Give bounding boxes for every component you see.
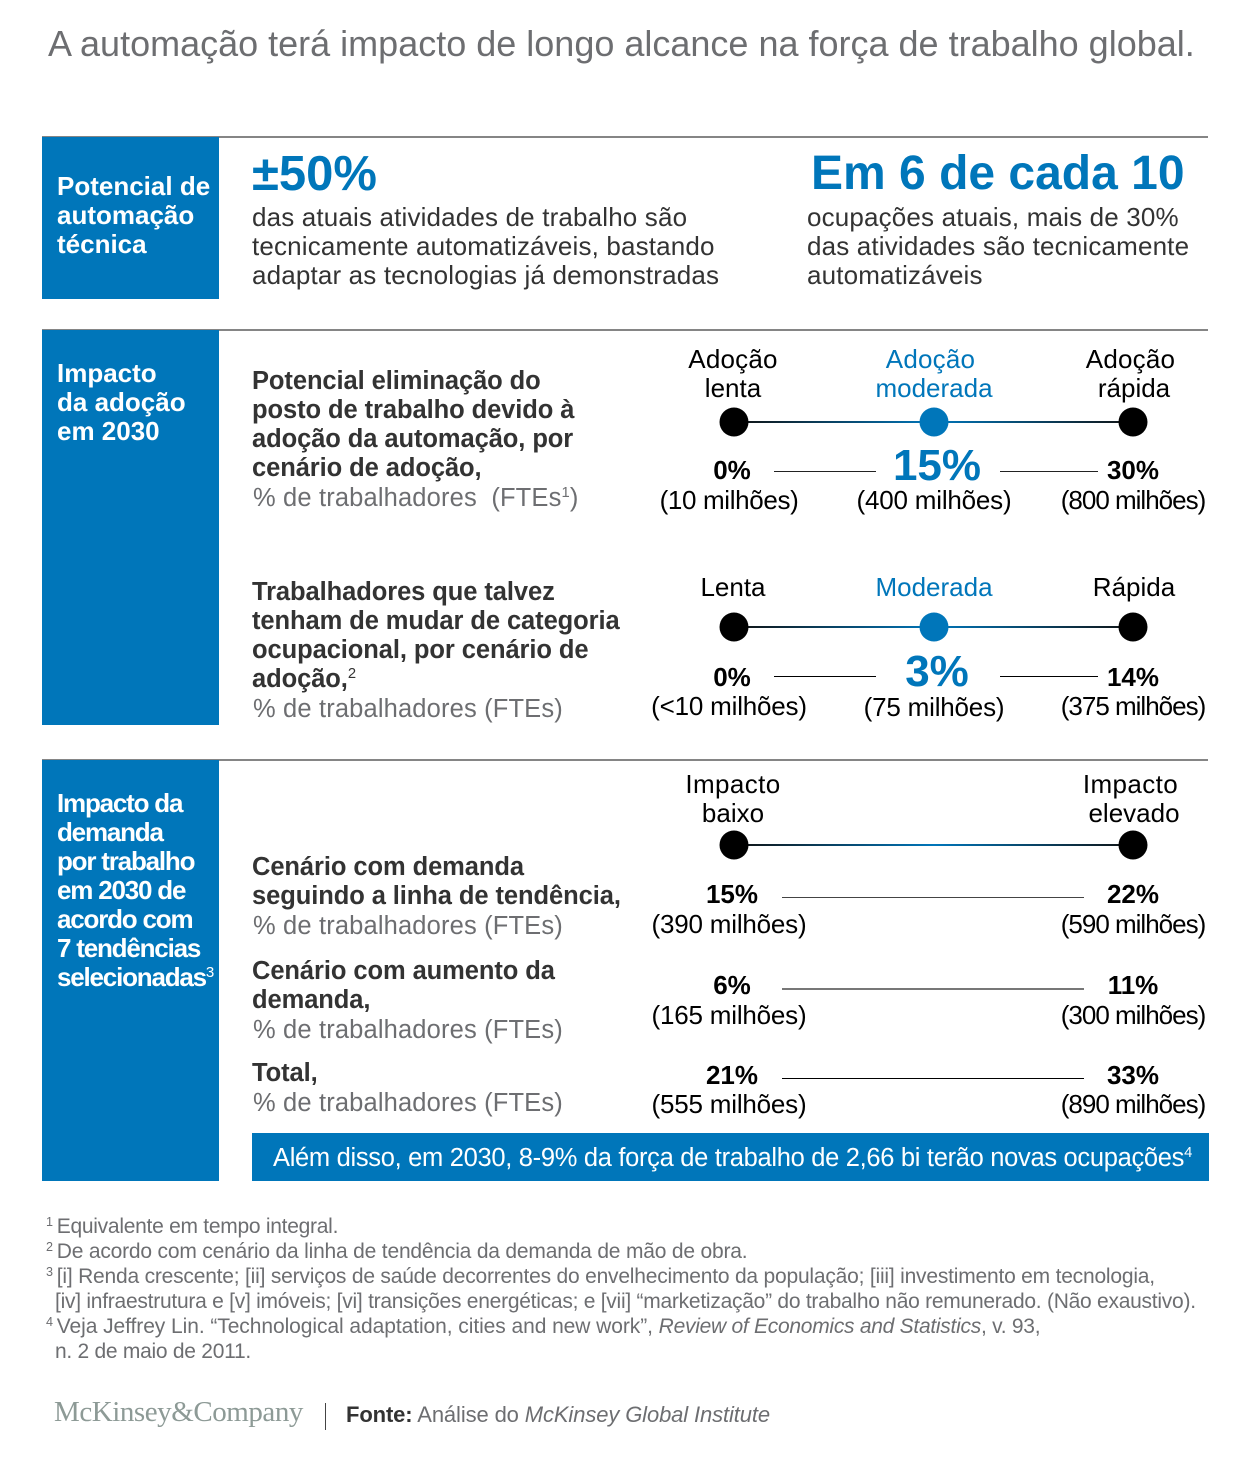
scale: impacto xyxy=(720,830,1148,860)
row label: total: Total, xyxy=(252,1058,318,1086)
label: impacto elevado: Impacto xyxy=(1083,769,1178,799)
row label: mudança de categoria: ocupacional, por cenário de xyxy=(252,636,588,664)
sidebar heading: demanda: demanda xyxy=(57,817,163,847)
value: 3%: 3% xyxy=(905,647,969,696)
row label: eliminação xyxy=(252,366,578,512)
scenario labels: eliminação xyxy=(688,344,1175,402)
value: 21%: 21% xyxy=(706,1060,758,1090)
scale: eliminação xyxy=(720,408,1148,642)
text: ocupações atuais xyxy=(807,202,1189,290)
label: adoção moderada xyxy=(875,344,993,402)
panel: impacto da demanda xyxy=(42,759,1209,1181)
text: atividades automatizáveis: das atuais atividades de trabalho são xyxy=(252,202,687,232)
sidebar: adoção xyxy=(42,330,219,725)
label: adoção rápida: rápida xyxy=(1098,372,1170,402)
value: 11% xyxy=(1061,970,1205,1030)
value: 6%: 6% xyxy=(713,970,751,1000)
value: 0% xyxy=(660,455,798,514)
value: 33% xyxy=(1061,1060,1205,1119)
top rule xyxy=(42,136,1208,138)
footnotes: 1Equivalente em tempo integral. xyxy=(46,1215,338,1238)
value: 22% xyxy=(1061,879,1205,938)
label: adoção rápida: Adoção xyxy=(1086,344,1175,374)
title: A automação terá impacto de longo alcance na força de trabalho global. xyxy=(48,23,1195,64)
sidebar: potencial de automação xyxy=(42,137,219,299)
row label: linha de tendência: seguindo a linha de tendência, xyxy=(252,882,621,910)
value: 15%: 15% xyxy=(706,879,758,909)
sidebar heading: adoção xyxy=(57,358,186,446)
row label: mudança de categoria: % de trabalhadores (FTEs) xyxy=(253,694,563,722)
value: 15% xyxy=(652,879,806,938)
row label: eliminação: Potencial eliminação do xyxy=(252,366,541,394)
panel: potencial de automação técnica xyxy=(42,136,1208,299)
sidebar heading: demanda xyxy=(57,788,214,992)
value: 15%: (390 milhões) xyxy=(652,908,806,938)
connector xyxy=(782,897,1084,898)
footnotes: 4Veja Jeffrey Lin. “Technological adaptation, cities and new work”, Review of Economics and Statistics, v. 93, xyxy=(46,1315,1040,1338)
value: 0% xyxy=(651,662,807,721)
value: 0%: (<10 milhões) xyxy=(651,691,807,721)
label: adoção rápida xyxy=(1086,344,1175,402)
label: impacto baixo: Impacto xyxy=(685,769,781,799)
value: 33%: 33% xyxy=(1107,1060,1159,1090)
footnotes: 3[i] Renda crescente; [ii] serviços de saúde decorrentes do envelhecimento da população; [iii] investimento em tecnologia, xyxy=(46,1265,1155,1288)
value: 11%: (300 milhões) xyxy=(1061,1000,1205,1030)
label: moderada: Moderada xyxy=(875,572,993,602)
row label: mudança de categoria: Trabalhadores que talvez xyxy=(252,578,555,606)
row label: total xyxy=(252,1058,563,1116)
footnotes: 2De acordo com cenário da linha de tendência da demanda de mão de obra. xyxy=(46,1240,747,1263)
row label: aumento da demanda: % de trabalhadores (FTEs) xyxy=(253,1016,563,1044)
row label: total: % de trabalhadores (FTEs) xyxy=(253,1088,563,1116)
value: 22%: 22% xyxy=(1107,879,1159,909)
row label: mudança de categoria: tenham de mudar de categoria xyxy=(252,606,620,634)
connector xyxy=(782,1078,1084,1079)
sidebar heading: potencial xyxy=(57,171,210,259)
value: 0%: 0% xyxy=(713,455,751,485)
row label: linha de tendência: % de trabalhadores (FTEs) xyxy=(253,912,563,940)
logo: McKinsey&Company: McKinsey&Company xyxy=(54,1396,303,1428)
stat: ±50%: ±50% xyxy=(252,147,377,201)
sidebar heading: adoção: em 2030 xyxy=(57,416,160,446)
row label: aumento da demanda: demanda, xyxy=(252,986,370,1014)
label: impacto elevado: elevado xyxy=(1088,798,1180,828)
value: 14% xyxy=(1061,662,1205,721)
label: adoção lenta: lenta xyxy=(705,372,761,402)
label: lenta: Lenta xyxy=(700,572,766,602)
row label: aumento da demanda: Cenário com aumento da xyxy=(252,956,555,984)
label: adoção moderada: moderada xyxy=(875,372,993,402)
label: impacto baixo xyxy=(685,769,781,828)
label: adoção lenta xyxy=(688,344,778,402)
label: impacto elevado xyxy=(1083,769,1180,828)
row label: mudança de categoria xyxy=(252,578,620,722)
row label: linha de tendência xyxy=(252,852,621,940)
sidebar heading: adoção: da adoção xyxy=(57,387,186,417)
row label: mudança de categoria: adoção,2 xyxy=(252,664,356,692)
label: impacto baixo: baixo xyxy=(702,798,764,828)
value: 30%: (800 milhões) xyxy=(1061,484,1205,514)
top rule xyxy=(42,329,1208,331)
sidebar heading: potencial: automação xyxy=(57,200,194,230)
sidebar heading: demanda: 7 tendências xyxy=(57,933,200,963)
text: ocupações atuais: ocupações atuais, mais de 30% xyxy=(807,202,1179,232)
label: adoção lenta: Adoção xyxy=(688,344,778,374)
row label: eliminação: % de trabalhadores (FTEs1) xyxy=(253,484,578,512)
text: ocupações atuais: das atividades são tecnicamente xyxy=(807,231,1189,261)
source divider xyxy=(325,1403,326,1430)
value: 400 milhões: (400 milhões) xyxy=(857,484,1011,514)
value: 11%: 11% xyxy=(1108,970,1158,1000)
value: 14%: (375 milhões) xyxy=(1061,691,1205,721)
footnotes xyxy=(46,1215,1196,1363)
text: atividades automatizáveis: tecnicamente automatizáveis, bastando xyxy=(252,231,715,261)
label: adoção moderada: Adoção xyxy=(886,344,975,374)
text: ocupações atuais: automatizáveis xyxy=(807,260,983,290)
connector xyxy=(774,471,876,472)
label: rápida: Rápida xyxy=(1093,572,1175,602)
stat: em 6 de cada 10: Em 6 de cada 10 xyxy=(811,147,1185,200)
value: 14%: 14% xyxy=(1107,662,1159,692)
value: 33%: (890 milhões) xyxy=(1061,1089,1205,1119)
value: 30%: 30% xyxy=(1107,455,1159,485)
row label: linha de tendência: Cenário com demanda xyxy=(252,852,524,880)
sidebar heading: potencial: Potencial de xyxy=(57,171,210,201)
top rule xyxy=(42,759,1208,761)
sidebar heading: demanda: selecionadas3 xyxy=(57,962,213,992)
value: 15%: 15% xyxy=(893,441,981,490)
sidebar heading: demanda: por trabalho xyxy=(57,846,194,876)
sidebar heading: demanda: Impacto da xyxy=(57,788,182,818)
sidebar heading: demanda: acordo com xyxy=(57,904,192,934)
connector xyxy=(1000,471,1098,472)
value: 21%: (555 milhões) xyxy=(652,1089,806,1119)
sidebar: demanda xyxy=(42,760,219,1181)
callout: novas ocupações xyxy=(252,1133,1209,1181)
value: 6%: (165 milhões) xyxy=(652,1000,806,1030)
text: atividades automatizáveis xyxy=(252,202,719,290)
value: 21% xyxy=(652,1060,806,1119)
value: 0%: (10 milhões) xyxy=(660,484,798,514)
panel: impacto da adoção em 2030 xyxy=(42,329,1208,725)
text: atividades automatizáveis: adaptar as tecnologias já demonstradas xyxy=(252,260,719,290)
row label: aumento da demanda xyxy=(252,956,563,1044)
source: Fonte: Análise do McKinsey Global Institute xyxy=(346,1402,770,1427)
value: 75 milhões: (75 milhões) xyxy=(864,692,1004,722)
value: 0%: 0% xyxy=(713,662,751,692)
footnotes: [iv] infraestrutura e [v] imóveis; [vi] transições energéticas; e [vii] “marketização” do trabalho não remunerado. (Não exaustivo). xyxy=(55,1290,1196,1313)
sidebar heading: demanda: em 2030 de xyxy=(57,875,185,905)
value: 30% xyxy=(1061,455,1205,514)
sidebar heading: adoção: Impacto xyxy=(57,358,157,388)
footnotes: n. 2 de maio de 2011. xyxy=(55,1340,251,1363)
connector xyxy=(1000,676,1098,677)
connector xyxy=(774,676,876,677)
callout: novas ocupações: Além disso, em 2030, 8-9% da força de trabalho de 2,66 bi terão novas ocupações4 xyxy=(273,1144,1192,1172)
row label: eliminação: cenário de adoção, xyxy=(252,454,482,482)
value: 22%: (590 milhões) xyxy=(1061,908,1205,938)
row label: eliminação: adoção da automação, por xyxy=(252,424,573,452)
sidebar heading: potencial: técnica xyxy=(57,229,147,259)
value: 6% xyxy=(652,970,806,1030)
row label: eliminação: posto de trabalho devido à xyxy=(252,396,574,424)
connector xyxy=(782,988,1084,990)
